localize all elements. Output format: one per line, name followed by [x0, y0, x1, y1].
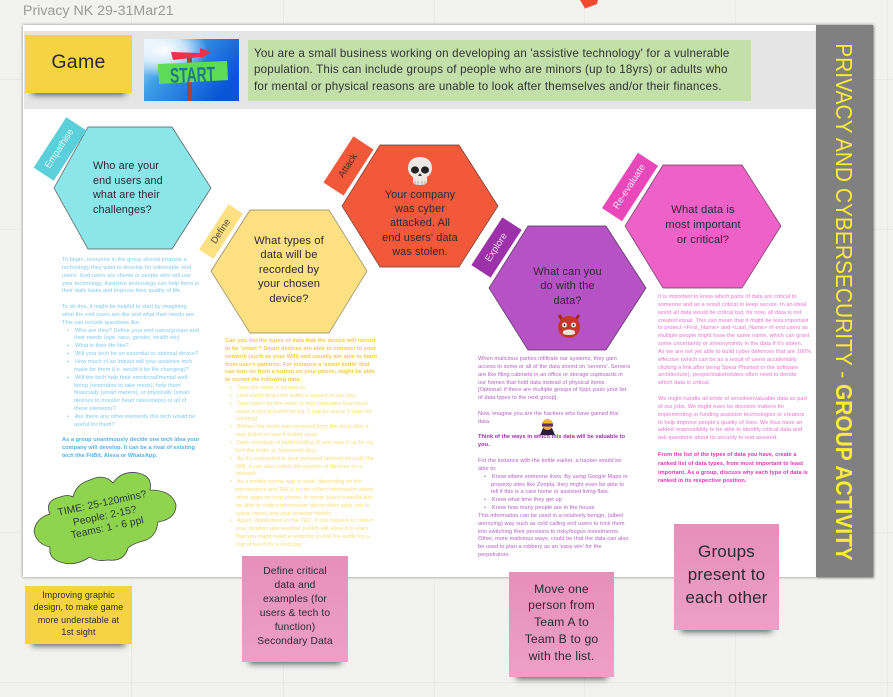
- text block: define: network: [236, 471, 256, 477]
- hexagon text: explore: [533, 266, 602, 307]
- tag: Re-evaluate: [602, 153, 658, 221]
- text block: define: boil the kettle at 7am/week day): [236, 448, 316, 454]
- image: start sign: START: [170, 63, 216, 88]
- intro text: You are a small business working on developing an 'assistive technology' for a vulnerable: [254, 46, 730, 60]
- hexagon text: empathise: what are their: [93, 189, 160, 201]
- text block: empathise: This can include questions like:: [62, 320, 141, 326]
- text block: define: cooking): [236, 416, 257, 422]
- hexagon text: re-evaluate: most important: [665, 219, 741, 231]
- sticky: improving graphic design: [25, 586, 132, 644]
- text block: re-evaluate: which data is critical.: [658, 380, 710, 386]
- sticky: groups present: [674, 524, 779, 630]
- cloud: time, people, teams: [34, 472, 176, 564]
- text block: re-evaluate: some uncertainty or annonyminity in the data if it's stolen.: [658, 341, 802, 347]
- text block: empathise: what the end users are like and what their needs are.: [62, 312, 196, 318]
- text block: re-evaluate: someone and as a result critical to keep secure. In an ideal: [658, 302, 806, 308]
- text block: explore: When malicious parties infiltrate our systems, they gain: [478, 356, 617, 362]
- text block: define: water is being boiled for eg. 1 cup for tea or 6 cups for: [236, 409, 372, 415]
- hexagon text: explore: data?: [553, 295, 582, 307]
- text block: explore: • Know how many people are in the house: [484, 505, 595, 511]
- text block: empathise: users'. End users are clients or people who will use: [62, 273, 191, 279]
- hexagon text: define: your chosen: [258, 278, 320, 290]
- hexagon text: define: [254, 234, 324, 304]
- sticky: move one person: [509, 572, 614, 677]
- sticky: improving graphic design: more understable at: [38, 615, 119, 625]
- text block: explore: [Optional: if there are multiple groups of 5ppl, pass your list: [478, 387, 626, 393]
- hexagon text: define: device?: [269, 292, 309, 304]
- text block: re-evaluate: world all data would be critical but, for now, all data is not: [658, 310, 801, 316]
- sticky: move one person: Team B to go: [525, 632, 598, 646]
- text block: explore: data.: [478, 419, 491, 425]
- text block: empathise: their needs (age, race, gender, health etc): [74, 335, 180, 341]
- hexagon: empathise: [54, 127, 211, 249]
- text block: define: permissions and T&Cs, it can collect information about: [236, 487, 373, 493]
- hexagon text: empathise: Who are your: [93, 160, 159, 172]
- intro text: for mental or physical reasons are unable to look after themselves and/or their finances.: [254, 80, 722, 92]
- text block: re-evaluate: clicking a link after being Spear Phished or the software: [658, 365, 798, 371]
- intro text: [254, 46, 730, 92]
- sticky: improving graphic design: design, to make game: [34, 602, 123, 612]
- text block: explore: [478, 356, 630, 558]
- text block: empathise: • Will your tech be an essential or optional device?: [67, 351, 198, 357]
- text block: empathise: devices to monitor heart rates/steps) or all of: [74, 398, 186, 404]
- text block: explore: • Know where someone lives. By using Google Maps or: [484, 474, 628, 480]
- tag: Empathise: Empathise: [43, 126, 76, 170]
- text block: explore: are like filing cabinets in an office or storage cupboards in: [478, 372, 623, 378]
- text block: empathise: As a group unanimously decide one tech idea your: [62, 437, 199, 443]
- text block: re-evaluate: effective (which can be as a result of users accidentally: [658, 357, 797, 363]
- text block: empathise: To do this, it might be helpful to start by imagining: [62, 304, 187, 310]
- text block: define: • If/when the kettle was removed from the dock after it: [230, 424, 369, 430]
- icon: red cursor: [580, 0, 598, 8]
- sticky: move one person: person from: [528, 598, 595, 612]
- text block: define: to record the following data:: [225, 377, 301, 383]
- text block: empathise: company will develop. It can be a rival of existing: [62, 445, 195, 451]
- hexagon: explore: [489, 226, 646, 350]
- image: start sign: [144, 39, 239, 101]
- hexagon text: define: What types of: [254, 234, 324, 246]
- text block: define: from user's patterns. For instance a 'smart kettle' that: [225, 362, 370, 368]
- text block: empathise: financially (smart meters), or physically (smart: [74, 390, 190, 396]
- sticky: groups present: each other: [685, 588, 768, 607]
- text block: re-evaluate: We might handle all kinds of sensitive/valuable data as part: [658, 396, 807, 402]
- text block: define: • As a mobile phone app is used, depending on the: [230, 479, 362, 485]
- text block: define: • As it's connected to your personal network through the: [230, 456, 374, 462]
- tag: Empathise: [34, 117, 86, 180]
- hexagon text: attack: attacked. All: [390, 217, 450, 229]
- text block: define: using (open) and your browser history: [236, 511, 331, 517]
- text block: define: • Daily schedule of kettle boiling (if user sets it up for eg.: [230, 440, 375, 446]
- hexagon text: attack: was stolen.: [392, 246, 448, 258]
- sticky: define critical data: examples (for: [263, 594, 327, 605]
- text block: define: network (such as your Wifi) and usually are able to learn: [225, 354, 377, 360]
- text block: re-evaluate: of our jobs. We might even be decision makers for: [658, 404, 784, 410]
- text block: explore: tell if this is a care home or assisted living flats.: [491, 489, 609, 495]
- title sidebar: [816, 25, 873, 577]
- text block: empathise: To begin, everyone in the group should propose a: [62, 257, 187, 263]
- icon: skull: [408, 157, 432, 185]
- text block: define: • Again, dependent on the T&C, it can request to collect: [230, 518, 373, 524]
- text block: explore: perpetrators.: [478, 552, 510, 558]
- text block: explore: able to:: [478, 466, 497, 472]
- text block: re-evaluate: As we are not yet able to build cyber defences that are 100%: [658, 349, 811, 355]
- text block: re-evaluate: ask questions about its security to rest assured.: [658, 435, 778, 441]
- text block: re-evaluate: From the list of the types of data you have, create a: [658, 452, 797, 458]
- text block: define: to be 'smart'? Smart devices are able to connect to your: [225, 346, 376, 352]
- text block: explore: access to some or all of the data stored on 'servers'. Servers: [478, 364, 630, 370]
- hexagon text: explore: do with the: [540, 280, 595, 292]
- tag: Attack: [323, 136, 374, 196]
- text block: explore: For the instance with the kettle earlier, a hacker would be: [478, 458, 622, 464]
- hexagon text: empathise: end users and: [93, 174, 163, 186]
- board title: Privacy NK 29-31Mar21: [23, 2, 174, 18]
- cloud text: People: 2-15?: [72, 504, 138, 528]
- text block: explore: annoying) way such as cold calling end users to trick them: [478, 521, 625, 527]
- text block: re-evaluate: multiple people might have the same name, which can grant: [658, 333, 809, 339]
- text block: define: • Time the kettle is turned on: [230, 385, 305, 391]
- hexagon: attack: [342, 145, 498, 267]
- sticky: groups present: present to: [688, 565, 765, 584]
- text block: define: [225, 338, 377, 548]
- text block: explore: you.: [478, 442, 490, 448]
- text block: explore: • Know what time they get up: [484, 497, 562, 503]
- hexagon text: empathise: challenges?: [93, 204, 152, 216]
- text block: empathise: [62, 257, 200, 459]
- text block: explore: into switching their pensions to risky/bogus investments.: [478, 529, 619, 535]
- hexagon: re-evaluate: [625, 165, 781, 288]
- text block: empathise: being (reminders to take meds), help them: [74, 382, 181, 388]
- sticky: define critical data: function): [275, 622, 315, 633]
- text block: define: other apps on your phone. In some cases it would also: [236, 495, 373, 501]
- text block: empathise: make for them (i.e. would it be life changing)?: [74, 367, 189, 373]
- text block: define: Wifi, it can also collect the number of devices on a: [236, 464, 362, 470]
- sidebar title: PRIVACY AND CYBERSECURITY - GROUP ACTIVITY: [830, 43, 856, 560]
- text block: empathise: • What is their life like?: [67, 343, 129, 349]
- text block: define: be able to collect information about other apps you're: [236, 503, 370, 509]
- text block: re-evaluate: created equal. This can mean that it might be less important: [658, 318, 809, 324]
- text block: re-evaluate: [658, 294, 811, 484]
- icon: ninja: [540, 419, 555, 435]
- text block: define: your location and weather (which will allow it to learn: [236, 526, 368, 532]
- text block: re-evaluate: It is important to know which parts of data are critical to: [658, 294, 797, 300]
- text block: empathise: technology they want to develop for vulnerable 'end: [62, 265, 191, 271]
- cloud text: [57, 489, 148, 542]
- sticky: groups present: Groups: [698, 542, 755, 561]
- text block: explore: be used to plan a robbery as an 'easy win' for the: [478, 544, 602, 550]
- text block: explore: of data types to the next group].: [478, 395, 558, 401]
- text block: re-evaluate: added responsibility to be able to identify critical data and: [658, 427, 802, 433]
- text block: define: was boiled or was it boiled again: [236, 432, 318, 438]
- text block: re-evaluate: ranked list of data types, from most important to least: [658, 461, 803, 467]
- text block: re-evaluate: to help improve people's quality of lives. We thus have an: [658, 420, 802, 426]
- text block: re-evaluate: to protect <First_Name> and <Last_Name> of end users as: [658, 325, 808, 331]
- text block: explore: Other, more malicious ways, could be that the data can also: [478, 536, 628, 542]
- sticky: improving graphic design: 1st sight: [61, 627, 96, 637]
- hexagon text: attack: was cyber: [395, 203, 445, 215]
- header band: [24, 31, 816, 109]
- text block: explore: property sites like Zoopla, they might even be able to: [491, 482, 624, 488]
- text block: empathise: your technology. Assistive technology can help them in: [62, 281, 199, 287]
- hexagon text: attack: end users' data: [382, 232, 458, 244]
- hexagon text: explore: What can you: [533, 266, 602, 278]
- text block: empathise: • Will the tech help their emotional/mental well-: [67, 375, 189, 381]
- hexagon text: empathise: [93, 160, 163, 216]
- intro text panel: [248, 40, 751, 101]
- tag: Explore: Explore: [483, 231, 510, 264]
- text block: define: cup of tea if it's a cold day: [236, 542, 301, 548]
- hexagon text: re-evaluate: What data is: [671, 204, 735, 216]
- tag: Define: Define: [209, 217, 233, 246]
- text block: empathise: tech like FitBit, Alexa or WhatsApp.: [62, 453, 157, 459]
- text block: empathise: • How much of an impact will your assistive tech: [67, 359, 192, 365]
- text block: empathise: their daily tasks and improve their quality of life.: [62, 288, 182, 294]
- tag: Define: [199, 204, 243, 259]
- text block: define: • How many times the kettle is turned on per day: [230, 393, 355, 399]
- text block: re-evaluate: ranked in its respective position.: [658, 478, 746, 484]
- icon: ogre face: [558, 314, 580, 338]
- cloud text: TIME: 25-120mins?: [57, 489, 148, 519]
- text block: re-evaluate: important. As a group, discuss why each type of data is: [658, 470, 808, 476]
- text block: explore: Think of the ways in which this data will be valuable to: [478, 434, 625, 440]
- hexagon text: define: recorded by: [259, 264, 319, 276]
- cloud text: Teams: 1 - 6 ppl: [70, 515, 145, 542]
- sticky: Game: Game: [51, 51, 106, 73]
- sticky: define critical data: data and: [274, 580, 316, 591]
- sticky: move one person: with the list.: [529, 649, 594, 663]
- text block: define: • Time taken for the water to boil (indicates how much: [230, 401, 368, 407]
- hexagon text: attack: [382, 188, 458, 258]
- text block: empathise: • Who are they? Define your end users/groups and: [67, 328, 199, 334]
- tag: Re-evaluate: Re-evaluate: [611, 162, 648, 211]
- hexagon text: re-evaluate: [665, 204, 741, 246]
- hexagon text: define: data will be: [260, 249, 318, 261]
- sticky: define critical data: users & tech to: [260, 608, 330, 619]
- hexagon: define: [211, 210, 367, 333]
- text block: define: Can you list the types of data that the device will record: [225, 338, 375, 344]
- text block: re-evaluate: architecture), people/stakeholders often need to decide: [658, 372, 797, 378]
- tag: Attack: Attack: [336, 152, 360, 180]
- text block: re-evaluate: implementing or funding assistive technologies or creators: [658, 412, 804, 418]
- tag: Explore: [471, 217, 522, 278]
- text block: explore: our homes that hold data instead of physical items.: [478, 380, 606, 386]
- sticky: define critical data: Secondary Data: [257, 636, 333, 647]
- text block: empathise: these elements?: [74, 406, 116, 412]
- board panel: [23, 25, 873, 577]
- intro text: population. This can include groups of people who are minors (up to 18yrs) or adults who: [254, 63, 728, 76]
- text block: empathise: • Are there any other elements this tech would be: [67, 414, 195, 420]
- text block: define: can turn on from a button on your phone, might be able: [225, 369, 375, 375]
- sticky: improving graphic design: Improving graphic: [42, 590, 115, 600]
- text block: empathise: useful for them?: [74, 422, 115, 428]
- text block: define: that you might need a reminder to boil the kettle for a: [236, 534, 369, 540]
- sticky: move one person: Move one: [534, 582, 589, 596]
- text block: explore: Now, imagine you are the hackers who have gained this: [478, 411, 618, 417]
- sticky: define critical data: [242, 556, 348, 662]
- sticky: move one person: Team A to: [534, 615, 589, 629]
- sticky: Game: [25, 35, 132, 93]
- hexagon text: re-evaluate: or critical?: [677, 234, 729, 246]
- sticky: define critical data: Define critical: [263, 566, 327, 577]
- hexagon text: attack: Your company: [385, 188, 455, 200]
- text block: explore: This information can be used in a relatively benign, (albeit: [478, 513, 623, 519]
